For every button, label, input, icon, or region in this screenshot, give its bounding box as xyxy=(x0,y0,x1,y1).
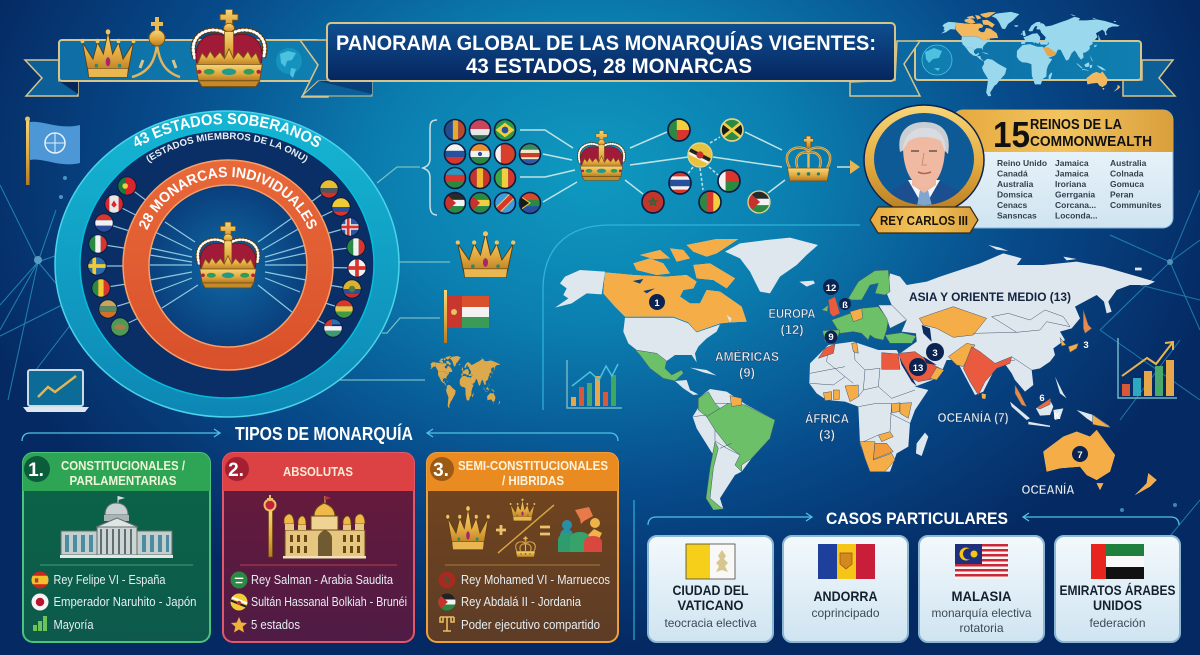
realm list column 1 xyxy=(997,158,1047,220)
list: Japan xyxy=(32,594,197,610)
text: VATICANO xyxy=(678,597,744,613)
realm list column 3: Gomuca xyxy=(1110,179,1144,189)
flag: Malaysia xyxy=(955,544,1008,579)
list: Morocco xyxy=(438,572,610,588)
portrait: Rey Carlos III xyxy=(864,105,984,233)
orange ring: 28 monarchs: 28 MONARCAS INDIVIDUALES xyxy=(139,167,317,230)
icon: central crown xyxy=(198,222,258,288)
number badge xyxy=(225,457,249,481)
label: Rey Carlos III: REY CARLOS III xyxy=(880,214,968,228)
rays to flags xyxy=(97,186,357,328)
icon: open crown hub xyxy=(787,136,830,181)
map labels: EUROPA xyxy=(768,306,816,321)
header ribbon left xyxy=(25,9,372,97)
panel: 15 reinos xyxy=(953,110,1173,228)
text: ANDORRA xyxy=(814,588,878,604)
realm list column 3 xyxy=(1110,158,1162,210)
map labels: (3) xyxy=(819,427,835,442)
section heading: tipos de monarquía xyxy=(22,423,618,444)
realm list column 1: Cenacs xyxy=(997,200,1028,210)
icon: flag on pole xyxy=(444,290,489,343)
list: Saudi: Rey Salman - Arabia Saudita xyxy=(251,573,393,587)
text: MALASIA xyxy=(952,588,1012,604)
icon: palace xyxy=(283,496,366,558)
text: UNIDOS xyxy=(1093,597,1142,613)
card title: PARLAMENTARIAS xyxy=(70,473,177,488)
mini world map xyxy=(941,12,1120,96)
section heading: tipos de monarquía: TIPOS DE MONARQUÍA xyxy=(235,423,413,444)
icon: gold crown connector target xyxy=(456,231,515,278)
flag: UAE xyxy=(1091,544,1144,579)
list: Japan: Emperador Naruhito - Japón xyxy=(54,595,197,609)
map labels: OCEANÍA (7) xyxy=(938,410,1008,425)
network glow right xyxy=(1100,190,1200,560)
heading: 15 reinos xyxy=(993,114,1152,155)
text: monarquía electiva xyxy=(932,606,1032,620)
text xyxy=(932,588,1032,635)
realm list column 2: Gerrgania xyxy=(1055,190,1095,200)
flag: Andorra xyxy=(818,544,875,579)
number badge xyxy=(24,456,50,482)
panel: semi-constitucionales xyxy=(427,453,618,642)
header ribbon right xyxy=(850,12,1175,96)
title box: PANORAMA GLOBAL DE LAS MONARQUÍAS VIGENTES: xyxy=(336,32,876,55)
map number badges xyxy=(649,279,1089,462)
map labels: ÁFRICA xyxy=(805,411,850,426)
map labels: AMÉRICAS xyxy=(715,349,779,364)
realm list column 3: Communites xyxy=(1110,200,1162,210)
icon: gold mini map xyxy=(430,356,500,408)
heading: 15 reinos: 15 xyxy=(993,114,1030,155)
text xyxy=(1060,582,1176,630)
map labels: (9) xyxy=(739,365,755,380)
list: 5 states xyxy=(231,617,300,632)
card title: / HIBRIDAS xyxy=(502,473,564,488)
text: CIUDAD DEL xyxy=(672,582,749,598)
card: Emiratos xyxy=(1055,536,1180,642)
card title: ABSOLUTAS xyxy=(283,464,353,479)
realm list column 2: Corcana... xyxy=(1055,200,1096,210)
card: Andorra xyxy=(783,536,908,642)
list: Spain: Rey Felipe VI - España xyxy=(54,573,166,587)
list: Jordan: Rey Abdalá II - Jordania xyxy=(461,595,581,609)
map number badges: 1 xyxy=(654,298,660,309)
realm list column 3: Australia xyxy=(1110,158,1147,168)
map number badges: 12 xyxy=(826,283,836,294)
list: shared power: Poder ejecutivo compartido xyxy=(461,618,600,632)
panel: absolutas xyxy=(223,453,414,642)
inner disc xyxy=(148,186,308,346)
outer ring: 43 states: (ESTADOS MIEMBROS DE LA ONU) xyxy=(146,132,308,164)
icon: crown plus equals people xyxy=(446,499,602,557)
icon: globe outline xyxy=(922,45,952,75)
number badge: 2. xyxy=(228,460,244,481)
card title xyxy=(458,458,608,488)
outer ring: 43 states xyxy=(54,110,400,418)
text: EMIRATOS ÁRABES xyxy=(1060,582,1176,598)
map number badges: ß xyxy=(842,300,848,311)
card title xyxy=(61,458,185,488)
realm list column 2: Iroriana xyxy=(1055,179,1086,189)
asia overlays xyxy=(898,307,987,382)
list: Jordan xyxy=(438,594,581,610)
realm list column 2: Loconda... xyxy=(1055,210,1098,220)
list: Brunei: Sultán Hassanal Bolkiah - Brunéi xyxy=(251,595,407,609)
icon: globe xyxy=(276,48,302,78)
europe and africa overlays xyxy=(810,270,932,472)
icon: imperial crown xyxy=(193,9,265,87)
text xyxy=(664,582,757,630)
realm list column 1: Australia xyxy=(997,179,1034,189)
card: Malasia xyxy=(919,536,1044,642)
network glow left xyxy=(0,176,85,400)
number badge: 3. xyxy=(433,460,449,481)
map number badges: K xyxy=(1054,411,1061,422)
flag cluster xyxy=(642,119,770,213)
card title: SEMI-CONSTITUCIONALES xyxy=(458,458,608,473)
map number badges: 3 xyxy=(1083,340,1089,351)
map number badges: 13 xyxy=(913,363,923,374)
map labels: ASIA Y ORIENTE MEDIO (13) xyxy=(909,290,1071,304)
title box: 43 ESTADOS, 28 MONARCAS xyxy=(466,55,752,78)
list: Brunei xyxy=(230,594,407,610)
realm list column 2 xyxy=(1055,158,1098,220)
canada xyxy=(603,239,747,332)
text: rotatoria xyxy=(960,621,1004,635)
map labels xyxy=(715,290,1075,497)
number badge: 1. xyxy=(28,460,44,481)
realm list column 3: Colnada xyxy=(1110,168,1144,178)
list: Morocco: Rey Mohamed VI - Marruecos xyxy=(461,573,610,587)
text xyxy=(812,588,880,620)
list: Spain xyxy=(32,572,166,588)
list: Saudi xyxy=(230,572,393,588)
icon: bar chart left xyxy=(567,360,622,408)
card title: CONSTITUCIONALES / xyxy=(61,458,185,473)
text: teocracia electiva xyxy=(664,616,757,630)
realm list column 1: Reino Unido xyxy=(997,158,1047,168)
map number badges: 3 xyxy=(932,348,938,359)
arrow to Charles xyxy=(850,160,860,174)
realm list column 1: Sansncas xyxy=(997,210,1037,220)
card: Vaticano xyxy=(648,536,773,642)
realm list column 1: Canadá xyxy=(997,168,1028,178)
map frame lines xyxy=(543,225,860,640)
flags right xyxy=(320,180,366,337)
text: coprincipado xyxy=(812,606,880,620)
realm list column 2: Jamaica xyxy=(1055,168,1089,178)
title box xyxy=(327,23,895,81)
flags left xyxy=(88,177,136,336)
connection lines xyxy=(520,130,850,202)
heading: 15 reinos: COMMONWEALTH xyxy=(1030,133,1152,150)
section heading: casos particulares xyxy=(648,509,1179,528)
map labels: (12) xyxy=(780,322,804,337)
bracket of flags xyxy=(423,120,437,215)
icon: UN flag xyxy=(25,116,80,185)
number badge xyxy=(430,457,454,481)
americas overlays xyxy=(625,279,775,510)
realm list column 2: Jamaica xyxy=(1055,158,1089,168)
connector lines from rings xyxy=(227,167,450,380)
world map xyxy=(555,238,1157,510)
icon: bar chart right xyxy=(1118,338,1177,398)
icon: laptop chart xyxy=(23,370,89,412)
map number badges: 7 xyxy=(1077,450,1083,461)
icon: sceptre xyxy=(264,495,276,557)
map labels: OCEANÍA xyxy=(1022,482,1075,497)
circle diagram: states and monarchs xyxy=(54,110,400,418)
continents xyxy=(555,238,1157,510)
icon: small gold crown xyxy=(81,29,135,77)
section heading: casos particulares: CASOS PARTICULARES xyxy=(826,509,1008,528)
icon: parliament building xyxy=(60,496,173,558)
icon: orb and sceptre curves xyxy=(132,17,180,77)
list: majority: Mayoría xyxy=(54,618,94,632)
flag grid xyxy=(444,120,540,216)
realm list column 1: Domsica xyxy=(997,190,1033,200)
list: majority xyxy=(33,616,94,632)
text: federación xyxy=(1090,616,1146,630)
icon: crown hub xyxy=(579,131,624,180)
list: 5 states: 5 estados xyxy=(251,618,300,632)
realm list column 3: Peran xyxy=(1110,190,1134,200)
orange ring: 28 monarchs xyxy=(122,159,334,371)
australia and new zealand xyxy=(1043,430,1157,495)
outer ring: 43 states: 43 ESTADOS SOBERANOS xyxy=(134,113,322,147)
heading: 15 reinos: REINOS DE LA xyxy=(1030,116,1122,133)
flag: Vatican xyxy=(686,544,735,579)
map number badges: 9 xyxy=(828,332,834,343)
map number badges: 6 xyxy=(1039,393,1045,404)
panel: constitucionales xyxy=(23,453,210,642)
